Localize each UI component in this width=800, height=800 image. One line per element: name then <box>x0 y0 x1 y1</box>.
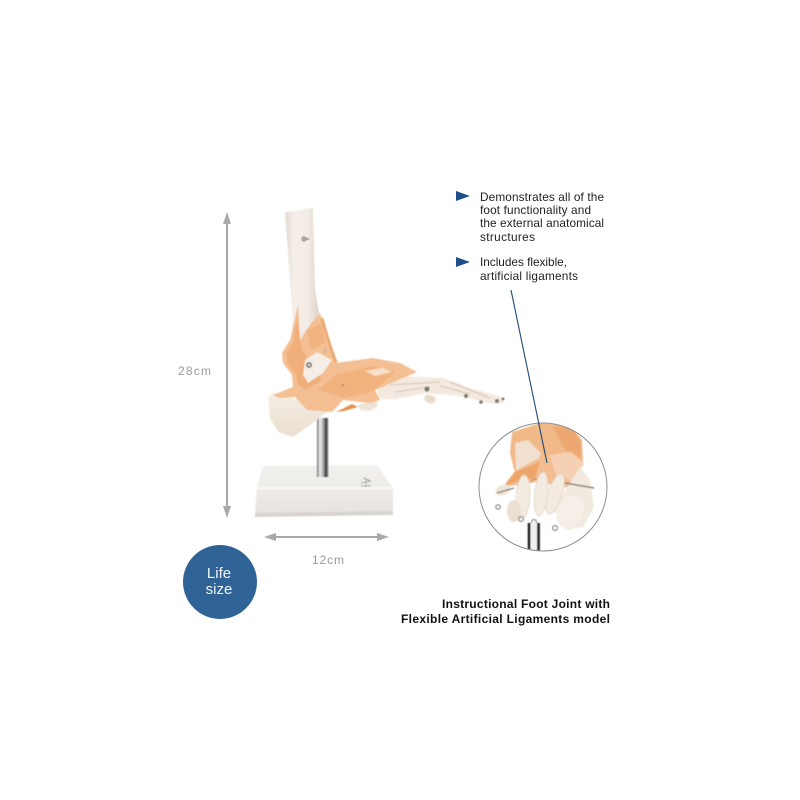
text: feature 1 <box>480 190 604 244</box>
arrow: 12cm width dimension <box>264 533 389 541</box>
title: product name: Instructional Foot Joint with <box>442 597 610 611</box>
lower ligament <box>503 452 584 488</box>
badge: life size: Life <box>207 565 231 582</box>
icon: bullet arrow 1 <box>456 191 470 201</box>
inset: front view of foot in circle <box>479 423 607 553</box>
orange ligaments <box>273 305 417 412</box>
screw <box>302 237 309 241</box>
title: product name: Flexible Artificial Ligaments model <box>401 612 610 626</box>
arrow: 28cm height dimension <box>223 212 231 518</box>
stand base <box>255 465 393 517</box>
icon: bullet arrow 2 <box>456 257 470 267</box>
metatarsal and toe bones <box>358 376 505 411</box>
text: feature 1: foot functionality and <box>480 203 591 217</box>
upper ligaments <box>510 423 583 473</box>
badge: life size: size <box>206 581 232 598</box>
callout line: ligaments <box>511 290 547 463</box>
text: feature 2 <box>480 255 578 283</box>
text: feature 1: structures <box>480 230 535 244</box>
text: feature 2: Includes flexible, <box>480 255 567 269</box>
label: 12cm: 12cm <box>312 553 344 567</box>
heel bone <box>268 393 340 437</box>
text: feature 1: Demonstrates all of the <box>480 190 604 204</box>
badge: life size <box>183 545 257 619</box>
text: feature 2: artificial ligaments <box>480 269 578 283</box>
text: feature 1: the external anatomical <box>480 216 604 230</box>
toe bones <box>553 467 594 530</box>
post <box>527 522 538 550</box>
title: product name <box>401 597 610 626</box>
metal pin and rings <box>497 483 594 493</box>
tibia shaft <box>285 208 319 338</box>
ankle bone <box>303 347 332 383</box>
stand post <box>317 418 328 477</box>
mid bone <box>515 440 541 471</box>
label: 28cm: 28cm <box>178 364 211 378</box>
photo: foot joint model on stand <box>255 208 505 517</box>
